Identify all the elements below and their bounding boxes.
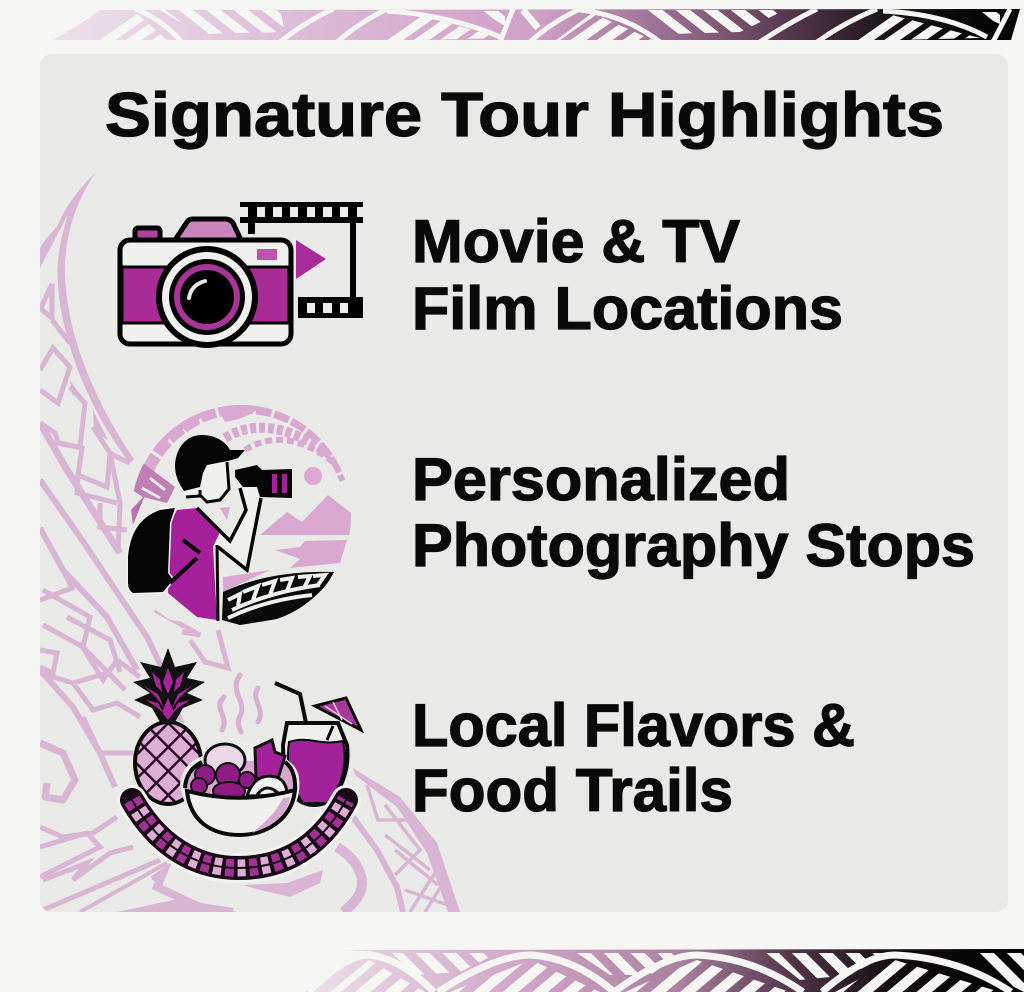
- icon: flower lei: [132, 800, 346, 868]
- local flavors label: [412, 692, 855, 824]
- icon: photographer in circle: [125, 402, 354, 628]
- bottom tribal border band: [300, 949, 1024, 992]
- icon: food bowl: [180, 740, 299, 840]
- icon: film strip: [240, 202, 363, 318]
- icon: camera: [120, 219, 291, 348]
- personalized photography label: Photography Stops: [412, 512, 975, 579]
- icon: camera and film strip: [120, 202, 363, 348]
- tribal tattoo pattern on panel left: [40, 173, 460, 912]
- water: [275, 540, 347, 568]
- local flavors label: Food Trails: [412, 757, 733, 824]
- photographer figure: [128, 435, 292, 621]
- icon: play triangle: [296, 240, 326, 279]
- personalized photography label: [412, 446, 975, 579]
- top tribal border band: [50, 9, 1024, 42]
- icon: steam: [220, 675, 260, 732]
- mountains: [260, 495, 351, 535]
- black woven swoosh: [222, 572, 334, 625]
- icon: food group: [130, 648, 361, 868]
- heading: Signature Tour Highlights: [105, 81, 944, 150]
- circular tribal background: [131, 402, 351, 625]
- sun: [304, 467, 322, 485]
- icon: pineapple: [130, 648, 206, 808]
- movie and tv label: [412, 208, 843, 342]
- movie and tv label: Movie & TV: [412, 208, 740, 275]
- personalized photography label: Personalized: [412, 446, 790, 513]
- icon: tropical drink: [275, 683, 361, 805]
- local flavors label: Local Flavors &: [412, 692, 855, 759]
- movie and tv label: Film Locations: [412, 275, 843, 342]
